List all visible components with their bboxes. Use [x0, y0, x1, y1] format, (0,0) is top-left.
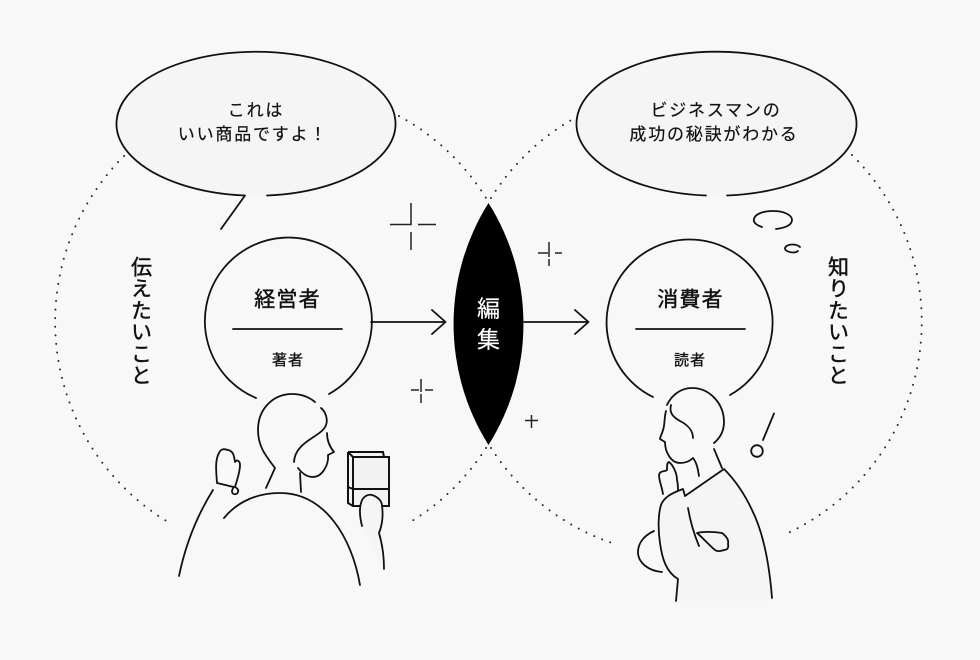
neck [300, 473, 301, 492]
back arm [638, 531, 662, 572]
person circle: executive / author: 経営者 [254, 288, 321, 312]
lens: editing: 編 [477, 296, 500, 322]
head back [667, 388, 724, 443]
raised hand [216, 449, 240, 494]
speech bubble: right: 成功の秘訣がわかる [629, 125, 799, 144]
dotted circle: left sphere [55, 116, 486, 524]
hand holding book [360, 495, 384, 569]
sparkle: upper right [538, 242, 562, 266]
speech bubble: left: これは [228, 101, 284, 120]
folded hand [697, 532, 728, 551]
dotted circle: right sphere [491, 119, 922, 545]
arrow: author to editing [371, 310, 446, 334]
arm [179, 490, 213, 576]
vertical label: what they want to know: 知りたいこと [826, 256, 849, 386]
sparkle: lower left [411, 379, 433, 403]
speech bubble: right [576, 52, 856, 196]
hair front [294, 408, 327, 462]
figure: reader [638, 388, 774, 601]
torso [659, 469, 772, 601]
torso fill [659, 469, 772, 601]
face [660, 411, 699, 476]
neck [714, 449, 722, 468]
vertical label: what they want to tell: 伝えたいこと [128, 256, 152, 386]
person circle: consumer / reader [607, 240, 773, 397]
thought bubbles [754, 211, 800, 252]
person circle: executive / author: 著者 [272, 352, 304, 369]
speech bubble: right: ビジネスマンの [650, 101, 782, 120]
sparkle: lower right [525, 415, 538, 428]
hair [670, 405, 693, 438]
lens: editing [454, 203, 523, 445]
lens: editing: 集 [477, 326, 500, 352]
head back [258, 394, 315, 488]
speech bubble: left [116, 52, 396, 229]
figure: author [179, 394, 389, 585]
hand at chin [659, 462, 678, 494]
person circle: executive / author [205, 238, 372, 398]
arrow: editing to reader [524, 310, 588, 334]
folded arm line [688, 508, 699, 546]
book [348, 452, 389, 506]
face [298, 433, 334, 477]
person circle: consumer / reader: 消費者 [657, 288, 724, 312]
sparkle: large upper left [390, 203, 436, 250]
exclamation mark [751, 414, 774, 457]
shoulders [224, 493, 360, 585]
speech bubble: left: いい商品ですよ！ [178, 125, 328, 144]
person circle: consumer / reader: 読者 [674, 352, 706, 369]
